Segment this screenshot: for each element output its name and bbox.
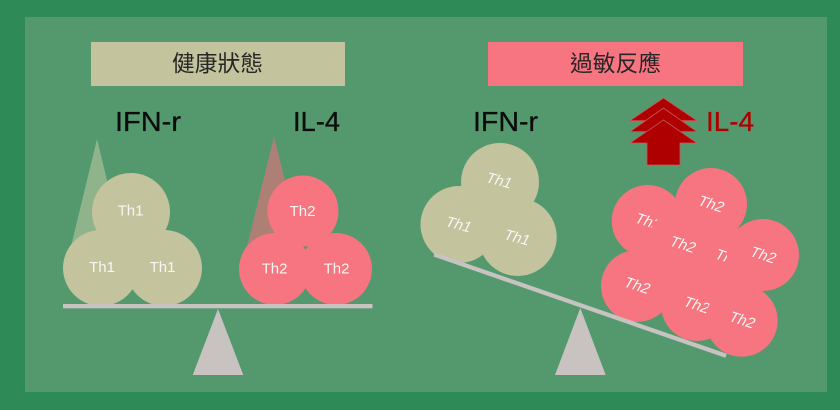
light triangle: Th2 side <box>242 137 307 267</box>
balanced scale: healthy <box>63 137 372 375</box>
cluster: Th2 cells tilted: Th2 <box>694 193 728 216</box>
label: IL-4 healthy: IL-4 <box>293 106 340 137</box>
light triangle: Th1 side <box>66 139 128 267</box>
cluster: Th2 cells tilted: Th2 <box>746 244 780 267</box>
heading: healthy state: 健康狀態 <box>172 52 263 76</box>
cluster: Th1 cells: Th1 <box>89 259 115 276</box>
cluster: Th2 cells: Th2 <box>290 203 315 220</box>
cluster: Th2 cells: Th2 <box>324 260 349 278</box>
cluster: Th2 cells tilted: Th2 <box>666 234 699 256</box>
cluster: Th2 cells: Th2 <box>262 260 287 278</box>
tilted scale: allergic <box>420 143 799 375</box>
cluster: Th2 cells tilted: Th2 <box>620 275 654 297</box>
beam <box>63 304 372 308</box>
beam tilted <box>434 252 727 358</box>
cluster: Th2 cells <box>239 176 372 305</box>
cluster: Th2 cells tilted: Th2 <box>680 294 713 317</box>
cluster: Th1 cells tilted <box>420 143 557 276</box>
cluster: Th2 cells tilted: Th2 <box>711 247 745 269</box>
cluster: Th1 cells: Th1 <box>150 259 175 276</box>
cluster: Th1 cells: Th1 <box>118 202 143 220</box>
cluster: Th2 cells tilted <box>601 168 799 357</box>
cluster: Th2 cells tilted: Th2 <box>725 309 759 332</box>
label: IFN-r healthy: IFN-r <box>115 106 181 137</box>
heading: allergic reaction <box>488 42 743 86</box>
icon: rising arrows <box>630 98 697 165</box>
cluster: Th1 cells tilted: Th1 <box>501 227 533 249</box>
fulcrum <box>193 309 243 375</box>
heading: healthy state <box>91 42 345 86</box>
fulcrum <box>555 308 606 375</box>
cluster: Th1 cells tilted: Th1 <box>442 214 475 236</box>
cluster: Th1 cells tilted: Th1 <box>483 170 515 192</box>
label: IL-4 allergic, elevated: IL-4 <box>706 106 754 137</box>
label: IFN-r allergic: IFN-r <box>473 106 538 137</box>
cluster: Th1 cells <box>63 173 202 306</box>
heading: allergic reaction: 過敏反應 <box>570 52 661 76</box>
cluster: Th2 cells tilted: Th2 <box>631 211 665 233</box>
